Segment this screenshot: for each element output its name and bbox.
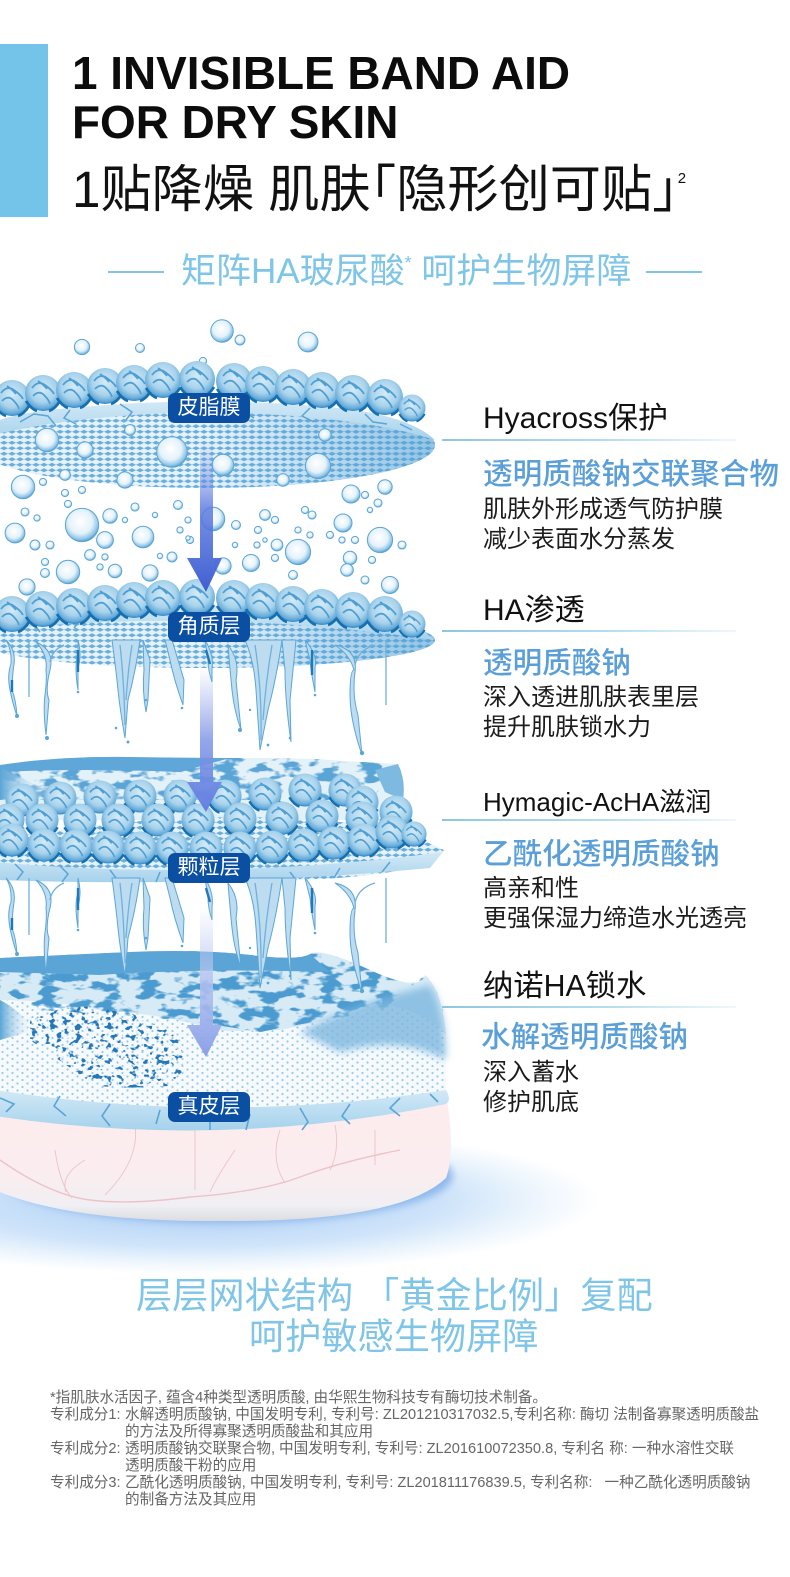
- description: [483, 875, 747, 932]
- layer 3 drips: [6, 878, 386, 993]
- label: 颗粒层: [168, 853, 250, 883]
- accent bar: [0, 44, 48, 217]
- label: 皮脂膜: [168, 393, 250, 423]
- layer 3: granular: [0, 757, 444, 882]
- top droplets: [74, 320, 318, 365]
- connector: [442, 819, 736, 821]
- water pool: [0, 951, 446, 1120]
- description: [483, 496, 723, 553]
- back rim: [0, 605, 434, 640]
- connector: [442, 1006, 736, 1008]
- layered skin illustration: [0, 319, 572, 1268]
- footnotes: 的制备方法及其应用: [125, 1492, 256, 1508]
- mesh disc: [0, 612, 435, 668]
- subtitle text: 矩阵HA玻尿酸* 呵护生物屏障: [181, 252, 631, 291]
- ingredient: 透明质酸钠交联聚合物: [483, 458, 779, 491]
- specks: [30, 1006, 185, 1088]
- mottled water: [0, 951, 425, 1032]
- back rim: [0, 402, 435, 440]
- label: 真皮层: [168, 1092, 250, 1122]
- layer 1: sebum membrane: [0, 361, 435, 488]
- dermis body: [0, 1095, 451, 1221]
- connector: [442, 630, 736, 632]
- description: 深入透进肌肤表里层: [483, 684, 699, 711]
- mesh disc: [0, 402, 435, 488]
- arrow 2: [187, 668, 222, 812]
- ingredient: 透明质酸钠: [483, 647, 631, 680]
- bottom glow: [0, 1126, 600, 1274]
- beads: [0, 579, 426, 638]
- beads: [0, 361, 426, 422]
- closing statement: 层层网状结构 「黄金比例」复配: [136, 1275, 653, 1316]
- title chinese: 1贴降燥 肌肤「隐形创可贴」2: [72, 161, 686, 218]
- footnotes: 乙酰化透明质酸钠, 中国发明专利, 专利号: ZL201811176839.5, 专利名称: 一种乙酰化透明质酸钠: [125, 1475, 750, 1491]
- description: 修护肌底: [483, 1089, 579, 1116]
- description: 肌肤外形成透气防护膜: [483, 496, 723, 523]
- description: 提升肌肤锁水力: [483, 714, 651, 741]
- connector: [442, 439, 736, 441]
- blood vessels: [0, 1125, 400, 1202]
- label: 角质层: 角质层: [178, 615, 240, 638]
- description: [483, 684, 699, 741]
- description: [483, 1059, 579, 1116]
- mesh disc: [0, 817, 444, 880]
- description: 减少表面水分蒸发: [483, 526, 675, 553]
- layer 4: dermis: [0, 951, 453, 1223]
- closing statement: 呵护敏感生物屏障: [249, 1316, 538, 1357]
- right wall shading: [300, 985, 446, 1060]
- callout: Nano HA: [442, 970, 736, 1116]
- label: 真皮层: 真皮层: [178, 1095, 240, 1118]
- bead rows: [0, 773, 427, 865]
- heading: Hyacross保护: [483, 402, 668, 435]
- title english: 1 INVISIBLE BAND AID FOR DRY SKIN: [72, 47, 570, 148]
- description: 高亲和性: [483, 875, 579, 902]
- description: 更强保湿力缔造水光透亮: [483, 905, 747, 932]
- footnotes: 专利成分2:: [50, 1441, 121, 1457]
- footnotes: 透明质酸干粉的应用: [125, 1458, 256, 1474]
- ingredient: 水解透明质酸钠: [481, 1021, 688, 1054]
- front mesh rim: [0, 1090, 449, 1130]
- water top: [0, 757, 404, 820]
- footnotes: 水解透明质酸钠, 中国发明专利, 专利号: ZL201210317032.5,专利名称: 酶切 法制备寡聚透明质酸盐: [125, 1407, 759, 1423]
- heading: Hymagic-AcHA滋润: [483, 787, 711, 817]
- label: 皮脂膜: 皮脂膜: [178, 396, 240, 419]
- description: 深入蓄水: [483, 1059, 579, 1086]
- footnotes: [50, 1389, 759, 1508]
- footnotes: 专利成分3:: [50, 1475, 121, 1491]
- footnotes: 的方法及所得寡聚透明质酸盐和其应用: [125, 1424, 373, 1440]
- arrow 3: [187, 905, 222, 1057]
- footnotes: 透明质酸钠交联聚合物, 中国发明专利, 专利号: ZL201610072350.8, 专利名 称: 一种水溶性交联: [125, 1441, 734, 1457]
- callout: Hyacross: [442, 402, 779, 553]
- arrow 1: [187, 440, 222, 592]
- label: 角质层: [168, 612, 250, 642]
- heading: HA渗透: [483, 594, 585, 627]
- callout: HA: [442, 594, 736, 741]
- layer 2: stratum corneum: [0, 579, 435, 668]
- floating bubbles: [5, 475, 406, 595]
- layer 2 drips: [6, 640, 386, 755]
- closing statement: [136, 1275, 653, 1357]
- heading: 纳诺HA锁水: [483, 970, 646, 1003]
- shadow: [0, 1129, 453, 1223]
- footnotes: 专利成分1:: [50, 1407, 121, 1423]
- callout: Hymagic: [442, 787, 747, 932]
- label: 颗粒层: 颗粒层: [178, 856, 240, 879]
- footnotes: *指肌肤水活因子, 蕴含4种类型透明质酸, 由华熙生物科技专有酶切技术制备。: [50, 1390, 547, 1406]
- surface droplets: [35, 425, 331, 488]
- front rim: [0, 852, 443, 882]
- ingredient: 乙酰化透明质酸钠: [483, 838, 720, 871]
